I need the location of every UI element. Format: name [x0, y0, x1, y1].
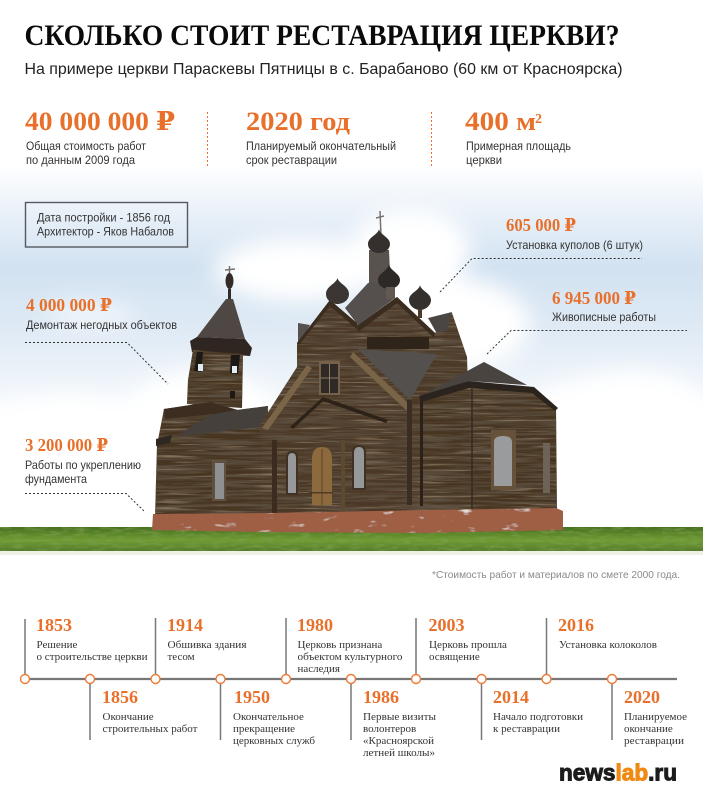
- event 1986: «Красноярской: [363, 735, 434, 747]
- church illustration: [152, 211, 563, 533]
- event 1914: 1914: [167, 615, 203, 635]
- stat: total cost: Общая стоимость работ: [26, 139, 146, 153]
- grass: [0, 527, 703, 555]
- event 1853: Решение: [36, 639, 77, 651]
- callout: paintings: Живописные работы: [552, 310, 656, 324]
- event 2016: 2016: [558, 615, 594, 635]
- callout: paintings: [487, 288, 687, 354]
- event 2014: [493, 687, 583, 735]
- stat: area: Примерная площадь: [466, 139, 571, 153]
- apse: [419, 362, 558, 512]
- title: СКОЛЬКО СТОИТ РЕСТАВРАЦИЯ ЦЕРКВИ?: [24, 19, 620, 52]
- event 2020: реставрации: [624, 735, 684, 747]
- event 1980: наследия: [298, 663, 340, 675]
- stat: completion year: Планируемый окончательный: [246, 139, 396, 153]
- event 1914: тесом: [168, 651, 195, 663]
- event 1856: 1856: [102, 687, 138, 707]
- event 2003: Церковь прошла: [429, 639, 507, 651]
- stat: total cost: 40 000 000 ₽: [25, 107, 175, 136]
- event 1853: 1853: [36, 615, 72, 635]
- event 1950: [233, 687, 315, 747]
- event 2003: освящение: [429, 651, 480, 663]
- callout: dismantling: [25, 295, 177, 384]
- callout: domes: [440, 215, 643, 292]
- event 1980: Церковь признана: [298, 639, 382, 651]
- event 2016: Установка колоколов: [559, 639, 657, 651]
- central nave: [260, 297, 468, 518]
- event 1853: о строительстве церкви: [36, 651, 148, 663]
- stat: completion year: 2020 год: [246, 107, 350, 136]
- stat: area: 2: [535, 112, 542, 127]
- event 1856: строительных работ: [102, 723, 198, 735]
- event 2020: Планируемое: [624, 711, 687, 723]
- event 1986: волонтеров: [363, 723, 416, 735]
- event 2014: к реставрации: [493, 723, 560, 735]
- event 1853: [36, 615, 148, 663]
- event 2020: [624, 687, 687, 747]
- event 1914: Обшивка здания: [168, 639, 246, 651]
- callout: paintings: 6 945 000 ₽: [552, 288, 636, 308]
- event 1986: Первые визиты: [363, 711, 437, 723]
- event 1856: Окончание: [102, 711, 154, 723]
- event 1986: [363, 687, 437, 759]
- stat: area: [465, 107, 571, 167]
- bell tower: [187, 266, 252, 408]
- callout: foundation: [25, 435, 144, 511]
- stat: completion year: срок реставрации: [246, 153, 337, 167]
- logo: newslab.ru: newslab.ru: [559, 760, 677, 786]
- event 2016: [558, 615, 657, 651]
- event 1950: прекращение: [233, 723, 295, 735]
- event 1980: 1980: [297, 615, 333, 635]
- event 1950: церковных служб: [233, 735, 315, 747]
- event 1986: летней школы»: [363, 747, 435, 759]
- callout: foundation: 3 200 000 ₽: [25, 435, 108, 455]
- callout: foundation: Работы по укреплению: [25, 458, 141, 472]
- stat: total cost: по данным 2009 года: [26, 153, 135, 167]
- event 1914: [167, 615, 246, 663]
- event 1986: 1986: [363, 687, 399, 707]
- event 2020: 2020: [624, 687, 660, 707]
- timeline: [20, 615, 687, 759]
- callout: dismantling: 4 000 000 ₽: [26, 295, 112, 315]
- event 1980: объектом культурного: [298, 651, 403, 663]
- domes: [326, 211, 431, 325]
- brick foundation: [152, 508, 563, 533]
- event 1950: Окончательное: [233, 711, 304, 723]
- info box: Дата постройки - 1856 год: [37, 210, 170, 224]
- stat: area: 400 м: [465, 107, 536, 136]
- sky background with clouds: [0, 165, 703, 565]
- callout: dismantling: Демонтаж негодных объектов: [26, 318, 177, 332]
- event 1856: [102, 687, 198, 735]
- stat: total cost: [25, 107, 175, 167]
- stat: completion year: [246, 107, 396, 167]
- entrance and windows: [272, 400, 424, 515]
- event 2003: 2003: [428, 615, 464, 635]
- info box: Архитектор - Яков Набалов: [37, 224, 174, 238]
- event 2020: окончание: [624, 723, 673, 735]
- event 1950: 1950: [234, 687, 270, 707]
- callout: foundation: фундамента: [25, 472, 87, 486]
- left wing: [155, 402, 270, 518]
- callout: domes: Установка куполов (6 штук): [506, 238, 643, 252]
- stat: area: церкви: [466, 153, 502, 167]
- event 2014: Начало подготовки: [493, 711, 583, 723]
- event 1980: [297, 615, 403, 675]
- info box: [26, 202, 188, 247]
- subtitle: На примере церкви Параскевы Пятницы в с. Барабаново (60 км от Красноярска): [24, 61, 622, 78]
- footnote: *Стоимость работ и материалов по смете 2000 года.: [432, 569, 680, 581]
- event 2014: 2014: [493, 687, 529, 707]
- callout: domes: 605 000 ₽: [506, 215, 576, 235]
- event 2003: [428, 615, 507, 663]
